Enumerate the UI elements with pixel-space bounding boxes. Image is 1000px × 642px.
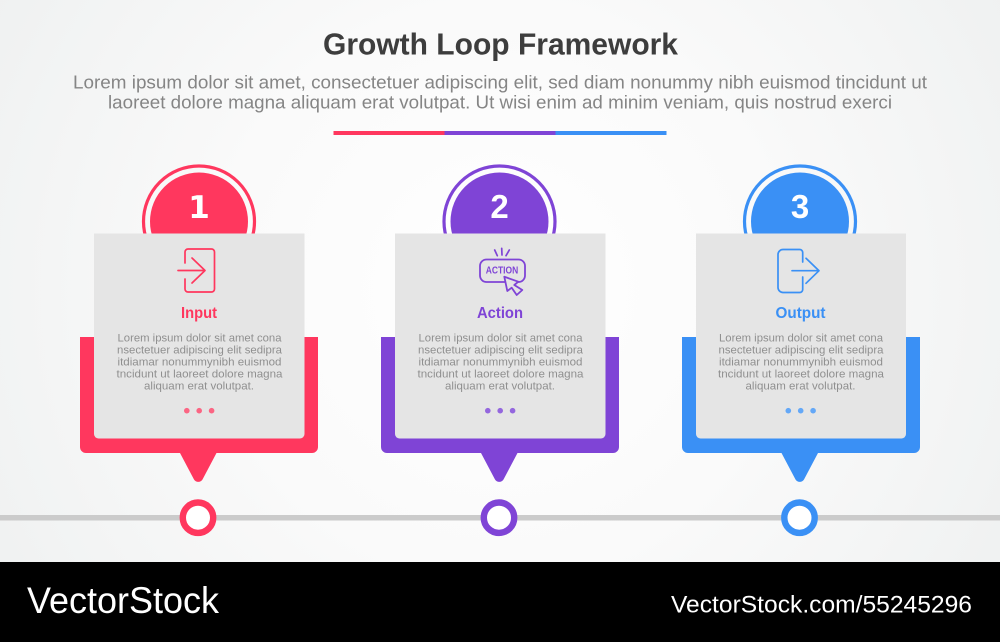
body text: itdiamar nonummynibh euismod — [719, 356, 883, 368]
heading: Action: Action — [477, 305, 523, 322]
icon: action button with cursor: ACTION — [486, 266, 518, 276]
body text: nsectetuer adipiscing elit sedipra — [418, 344, 584, 356]
body text: nsectetuer adipiscing elit sedipra — [718, 344, 884, 356]
heading: Output: Output — [776, 305, 826, 322]
panel: step 3 output — [682, 166, 920, 533]
body text: tncidunt ut laoreet dolore magna — [418, 368, 584, 380]
gray card — [395, 234, 606, 438]
body text: itdiamar nonummynibh euismod — [118, 356, 282, 368]
body text: Lorem ipsum dolor sit amet cona — [118, 332, 282, 344]
dots — [485, 408, 515, 414]
watermark band — [0, 562, 1000, 642]
heading: Input: Input — [181, 305, 218, 322]
subtitle text block: laoreet dolore magna aliquam erat volutpat. Ut wisi enim ad minim veniam, quis nostrud exerci — [108, 92, 892, 112]
body text — [418, 332, 584, 392]
number badge 3 — [744, 166, 856, 277]
timeline marker 3 — [784, 502, 815, 533]
gray card — [696, 234, 906, 438]
body text: aliquam erat volutpat. — [144, 380, 254, 392]
body text: tncidunt ut laoreet dolore magna — [718, 368, 885, 380]
body text: tncidunt ut laoreet dolore magna — [116, 368, 283, 380]
number badge 2 — [444, 166, 555, 277]
number badge 1 — [144, 166, 254, 277]
speech bubble base — [682, 337, 920, 482]
dots — [184, 408, 214, 414]
body text: Lorem ipsum dolor sit amet cona — [719, 332, 884, 344]
number badge 1: 1 — [188, 190, 210, 226]
timeline marker 2 — [484, 502, 514, 533]
subtitle text block — [73, 72, 927, 112]
panel: step 1 input — [80, 166, 318, 533]
body text — [718, 332, 885, 392]
body text: Lorem ipsum dolor sit amet cona — [418, 332, 583, 344]
watermark url text: VectorStock.com/55245296 — [671, 592, 972, 618]
number badge 2: 2 — [490, 188, 509, 225]
number badge 3: 3 — [791, 188, 809, 225]
watermark logo text: VectorStock — [27, 580, 219, 621]
panel: step 2 action — [381, 166, 619, 533]
body text: aliquam erat volutpat. — [746, 380, 856, 392]
dots — [786, 408, 816, 414]
tricolor divider — [334, 131, 666, 135]
timeline marker 1 — [183, 502, 213, 533]
body text: nsectetuer adipiscing elit sedipra — [117, 344, 283, 356]
icon: action button with cursor — [480, 248, 525, 295]
speech bubble base — [381, 337, 619, 482]
title: Growth Loop Framework — [323, 26, 679, 62]
body text: aliquam erat volutpat. — [445, 380, 555, 392]
icon: input door arrow — [178, 249, 214, 292]
gray card — [94, 234, 304, 438]
body text: itdiamar nonummynibh euismod — [418, 356, 582, 368]
icon: output door arrow — [778, 250, 819, 292]
body text — [116, 332, 283, 392]
speech bubble base — [80, 337, 318, 482]
subtitle text block: Lorem ipsum dolor sit amet, consectetuer adipiscing elit, sed diam nonummy nibh euismod tincidunt ut — [73, 72, 927, 92]
timeline line — [0, 515, 1000, 520]
